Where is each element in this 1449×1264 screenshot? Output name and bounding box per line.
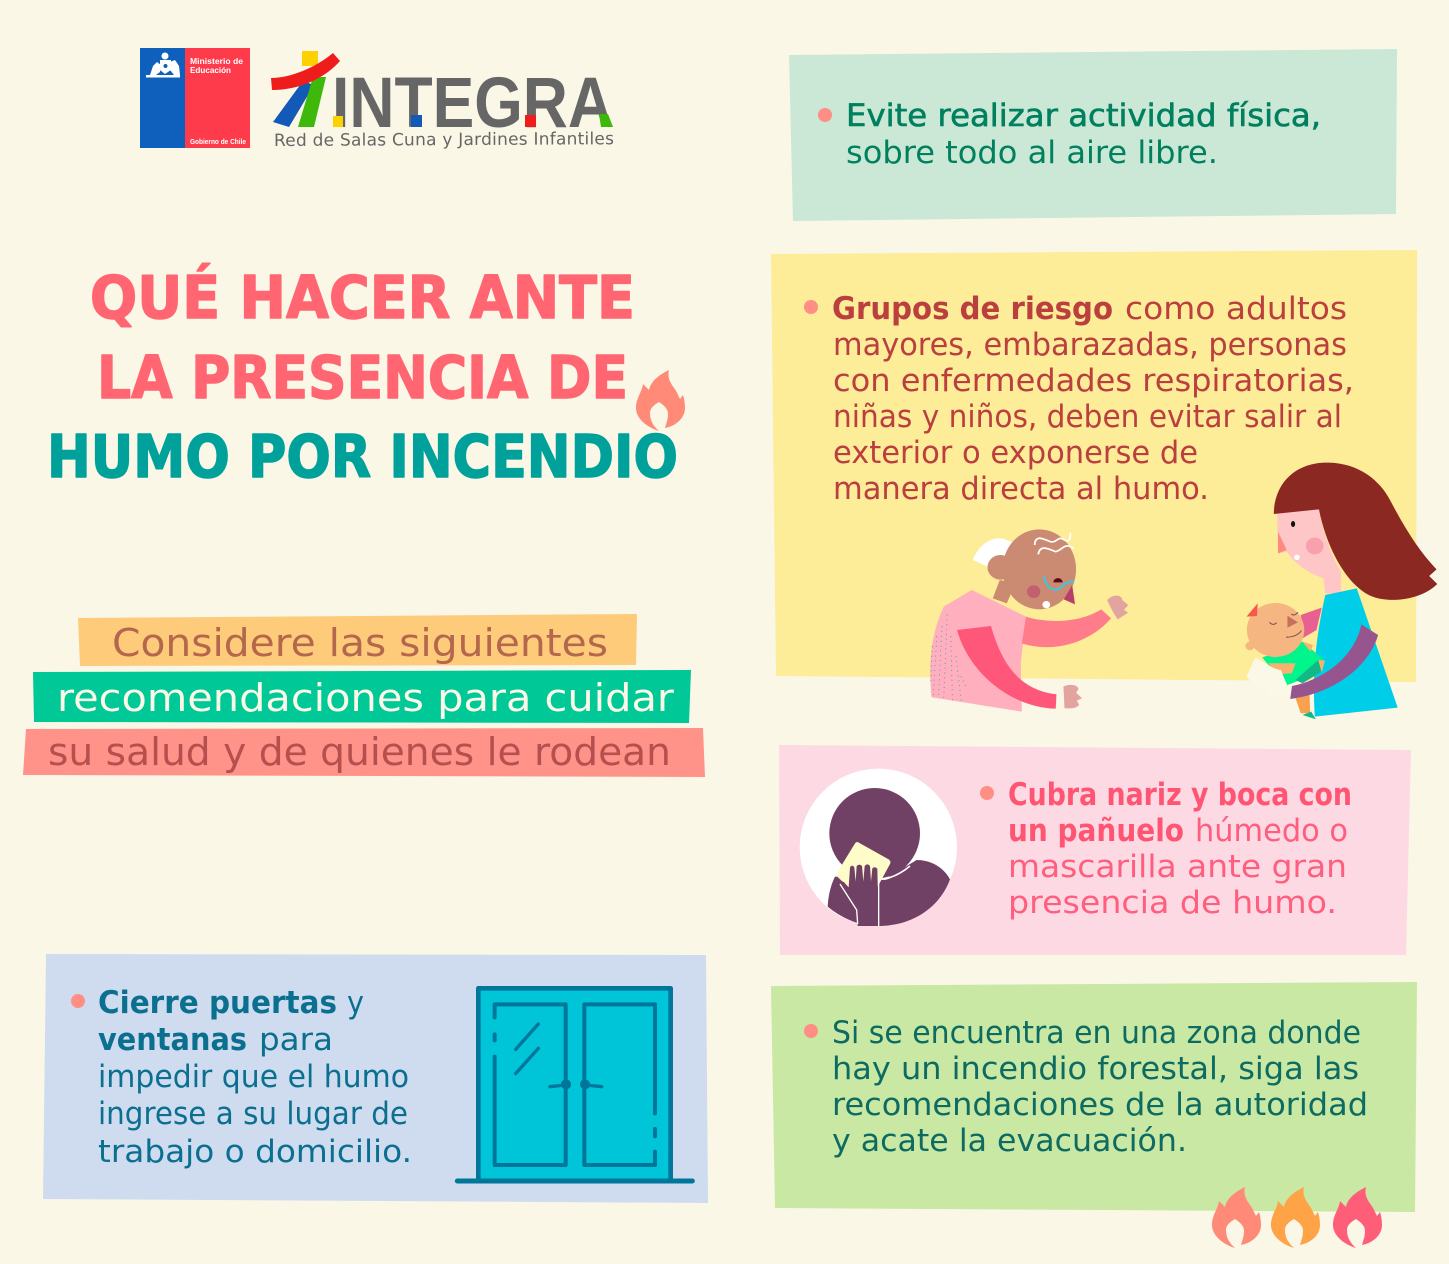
panel: cover nose and mouth: húmedo o bbox=[1195, 813, 1348, 849]
icon: three flames bbox=[1212, 1187, 1382, 1248]
panel: risk groups: manera directa al humo. bbox=[833, 471, 1209, 507]
logo: Integra: INTEGRA bbox=[332, 64, 613, 143]
panel: cover nose and mouth bbox=[779, 745, 1411, 955]
panel: risk groups: como adultos bbox=[1125, 291, 1347, 327]
panel: forest fire evacuation: Si se encuentra en una zona donde bbox=[832, 1015, 1361, 1051]
panel: forest fire evacuation: hay un incendio forestal, siga las bbox=[832, 1051, 1359, 1087]
logo: Ministerio de Educación: Ministerio de bbox=[190, 56, 243, 66]
title: QUÉ HACER ANTE bbox=[90, 263, 635, 332]
panel: avoid physical activity: Evite realizar actividad física, bbox=[846, 98, 1321, 134]
icon: flame beside title bbox=[636, 370, 685, 431]
icon: person covering face with cloth bbox=[800, 769, 957, 926]
panel: risk groups bbox=[771, 250, 1417, 682]
panel: cover nose and mouth: Cubra nariz y boca con bbox=[1008, 777, 1352, 813]
illustration: mother and baby bbox=[1245, 463, 1437, 719]
panel: risk groups: niñas y niños, deben evitar salir al bbox=[833, 399, 1342, 435]
subtitle highlight block bbox=[23, 614, 705, 777]
panel: cover nose and mouth: un pañuelo bbox=[1008, 813, 1184, 849]
panel: close doors and windows: trabajo o domicilio. bbox=[98, 1134, 412, 1170]
logo: Ministerio de Educación: Educación bbox=[190, 65, 231, 75]
title bbox=[47, 263, 678, 491]
title: LA PRESENCIA DE bbox=[97, 343, 628, 412]
panel: close doors and windows: ventanas bbox=[98, 1022, 247, 1058]
panel: risk groups: mayores, embarazadas, personas bbox=[833, 327, 1347, 363]
panel: close doors and windows: Cierre puertas bbox=[98, 985, 337, 1021]
subtitle highlight block: Considere las siguientes bbox=[112, 621, 608, 665]
panel: risk groups: exterior o exponerse de bbox=[833, 435, 1198, 471]
panel: close doors and windows: impedir que el humo bbox=[98, 1059, 409, 1095]
icon: double door bbox=[457, 988, 692, 1181]
panel: avoid physical activity: sobre todo al aire libre. bbox=[846, 135, 1218, 171]
title: HUMO POR INCENDIO bbox=[47, 422, 678, 491]
panel: risk groups: con enfermedades respiratorias, bbox=[833, 363, 1354, 399]
illustration: grandmother bbox=[930, 529, 1128, 712]
subtitle highlight block: su salud y de quienes le rodean bbox=[48, 730, 671, 774]
panel: cover nose and mouth: presencia de humo. bbox=[1008, 885, 1337, 921]
panel: forest fire evacuation: y acate la evacuación. bbox=[832, 1123, 1187, 1159]
panel: forest fire evacuation bbox=[771, 982, 1417, 1212]
logo: Integra bbox=[271, 51, 614, 151]
panel: close doors and windows: ingrese a su lugar de bbox=[98, 1096, 408, 1132]
panel: risk groups: Grupos de riesgo bbox=[832, 291, 1113, 327]
panel: avoid physical activity bbox=[789, 49, 1397, 221]
subtitle highlight block: recomendaciones para cuidar bbox=[57, 676, 674, 720]
logo: Ministerio de Educación: Gobierno de Chile bbox=[190, 137, 246, 146]
panel: close doors and windows: y bbox=[347, 985, 364, 1021]
panel: forest fire evacuation: recomendaciones de la autoridad bbox=[832, 1087, 1368, 1123]
panel: close doors and windows bbox=[43, 954, 708, 1203]
logo: Integra: Red de Salas Cuna y Jardines Infantiles bbox=[274, 129, 614, 151]
panel: close doors and windows: para bbox=[259, 1022, 333, 1058]
logo: Ministerio de Educación bbox=[140, 48, 250, 148]
panel: cover nose and mouth: mascarilla ante gran bbox=[1008, 849, 1347, 885]
